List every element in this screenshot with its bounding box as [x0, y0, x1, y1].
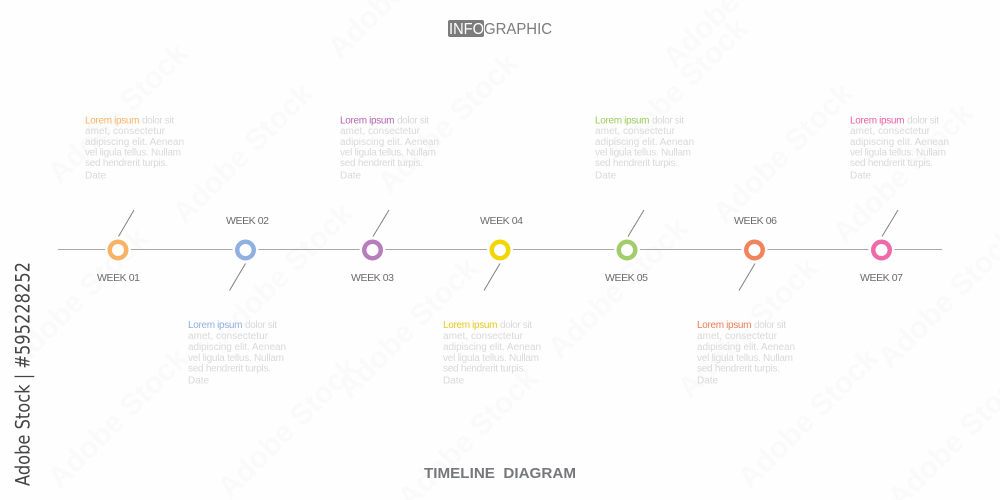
text block: week 02: amet, consectetur — [188, 331, 269, 342]
text block: week 01: sed hendrerit turpis. — [85, 158, 168, 169]
text block: week 07: Lorem ipsum — [850, 116, 904, 126]
text block: week 02 — [188, 320, 286, 386]
infographic canvas: Adobe Stock — [42, 37, 195, 190]
text block: week 03: dolor sit — [397, 116, 429, 126]
footer heading: timeline diagram: TIMELINE DIAGRAM — [424, 465, 576, 482]
timeline axis — [58, 248, 942, 250]
text block: week 03: amet, consectetur — [340, 126, 421, 137]
milestone: week 04: WEEK 04 — [480, 215, 523, 227]
infographic canvas: Adobe Stock — [332, 252, 485, 405]
text block: week 06 — [697, 320, 795, 386]
text block: week 05: Lorem ipsum — [595, 116, 650, 126]
text block: week 05: sed hendrerit turpis. — [595, 158, 678, 169]
infographic canvas: Adobe Stock — [207, 197, 360, 350]
text block: week 04: Date — [443, 376, 464, 386]
text block: week 07 — [850, 116, 949, 182]
infographic canvas: Adobe Stock — [542, 212, 695, 365]
text block: week 03: sed hendrerit turpis. — [340, 158, 423, 169]
text block: week 05: Date — [595, 170, 616, 182]
text block: week 03: adipiscing elit. Aenean — [340, 137, 439, 148]
milestone: week 05: WEEK 05 — [605, 272, 648, 284]
text block: week 05: adipiscing elit. Aenean — [595, 137, 694, 148]
milestone: week 01: WEEK 01 — [97, 272, 140, 284]
text block: week 07: sed hendrerit turpis. — [850, 158, 933, 169]
milestone: week 07: WEEK 07 — [860, 272, 903, 284]
text block: week 02: sed hendrerit turpis. — [188, 364, 271, 374]
text block: week 04: vel ligula tellus. Nullam — [443, 353, 539, 364]
text block: week 07: Date — [850, 170, 871, 182]
text block: week 04: adipiscing elit. Aenean — [443, 342, 541, 353]
text block: week 01: adipiscing elit. Aenean — [85, 137, 184, 148]
milestone: week 03 — [351, 210, 394, 284]
text block: week 05: dolor sit — [652, 116, 684, 126]
stock credit: vertical text: Adobe Stock | #595228252 — [12, 262, 34, 486]
text block: week 04 — [443, 320, 541, 386]
text block: week 04: sed hendrerit turpis. — [443, 364, 526, 374]
text block: week 04: amet, consectetur — [443, 331, 524, 342]
infographic canvas: Adobe Stock — [167, 77, 320, 230]
text block: week 06: sed hendrerit turpis. — [697, 364, 780, 374]
milestone: week 06 — [734, 215, 777, 290]
infographic canvas: Adobe Stock — [707, 77, 860, 230]
infographic canvas: Adobe Stock — [602, 12, 755, 165]
title: infographic — [448, 20, 552, 38]
text block: week 06: amet, consectetur — [697, 331, 778, 342]
milestone: week 07 — [860, 210, 903, 284]
title: infographic: GRAPHIC — [484, 21, 552, 38]
text block: week 05: vel ligula tellus. Nullam — [595, 148, 691, 158]
text block: week 02: dolor sit — [245, 320, 277, 331]
infographic canvas: Adobe Stock — [672, 252, 825, 405]
text block: week 06: adipiscing elit. Aenean — [697, 342, 795, 353]
milestone: week 02: WEEK 02 — [226, 215, 269, 227]
text block: week 06: Date — [697, 376, 718, 386]
infographic canvas: Adobe Stock — [2, 222, 155, 375]
milestone: week 05 — [605, 210, 648, 284]
milestone: week 01 — [97, 210, 140, 284]
text block: week 03: vel ligula tellus. Nullam — [340, 148, 436, 158]
text block: week 04: Lorem ipsum — [443, 320, 498, 331]
text block: week 02: Lorem ipsum — [188, 320, 242, 331]
text block: week 07: vel ligula tellus. Nullam — [850, 148, 946, 158]
milestone: week 03: WEEK 03 — [351, 272, 394, 284]
text block: week 01: amet, consectetur — [85, 126, 166, 137]
text block: week 03 — [340, 116, 439, 182]
milestone: week 06: WEEK 06 — [734, 215, 777, 227]
text block: week 01: Date — [85, 170, 106, 182]
text block: week 05 — [595, 116, 694, 182]
infographic canvas: Adobe Stock — [42, 342, 195, 495]
text block: week 01: vel ligula tellus. Nullam — [85, 148, 181, 158]
text block: week 01: Lorem ipsum — [85, 116, 140, 126]
text block: week 04: dolor sit — [500, 320, 532, 331]
infographic canvas: Adobe Stock — [372, 47, 525, 200]
text block: week 07: dolor sit — [907, 116, 939, 126]
text block: week 01 — [85, 116, 184, 182]
title: infographic: INFO — [449, 21, 484, 38]
text block: week 01: dolor sit — [142, 116, 174, 126]
text block: week 06: vel ligula tellus. Nullam — [697, 353, 793, 364]
text block: week 03: Lorem ipsum — [340, 116, 394, 126]
infographic canvas: Adobe Stock — [827, 97, 980, 250]
text block: week 06: dolor sit — [754, 320, 786, 331]
text block: week 02: adipiscing elit. Aenean — [188, 342, 286, 353]
text block: week 07: adipiscing elit. Aenean — [850, 137, 949, 148]
text block: week 02: Date — [188, 376, 209, 386]
text block: week 06: Lorem ipsum — [697, 320, 752, 331]
text block: week 03: Date — [340, 170, 361, 182]
milestone: week 02 — [226, 215, 269, 290]
text block: week 02: vel ligula tellus. Nullam — [188, 353, 284, 364]
milestone: week 04 — [480, 215, 523, 290]
text block: week 05: amet, consectetur — [595, 126, 676, 137]
text block: week 07: amet, consectetur — [850, 126, 931, 137]
infographic canvas: Adobe Stock — [732, 342, 885, 495]
